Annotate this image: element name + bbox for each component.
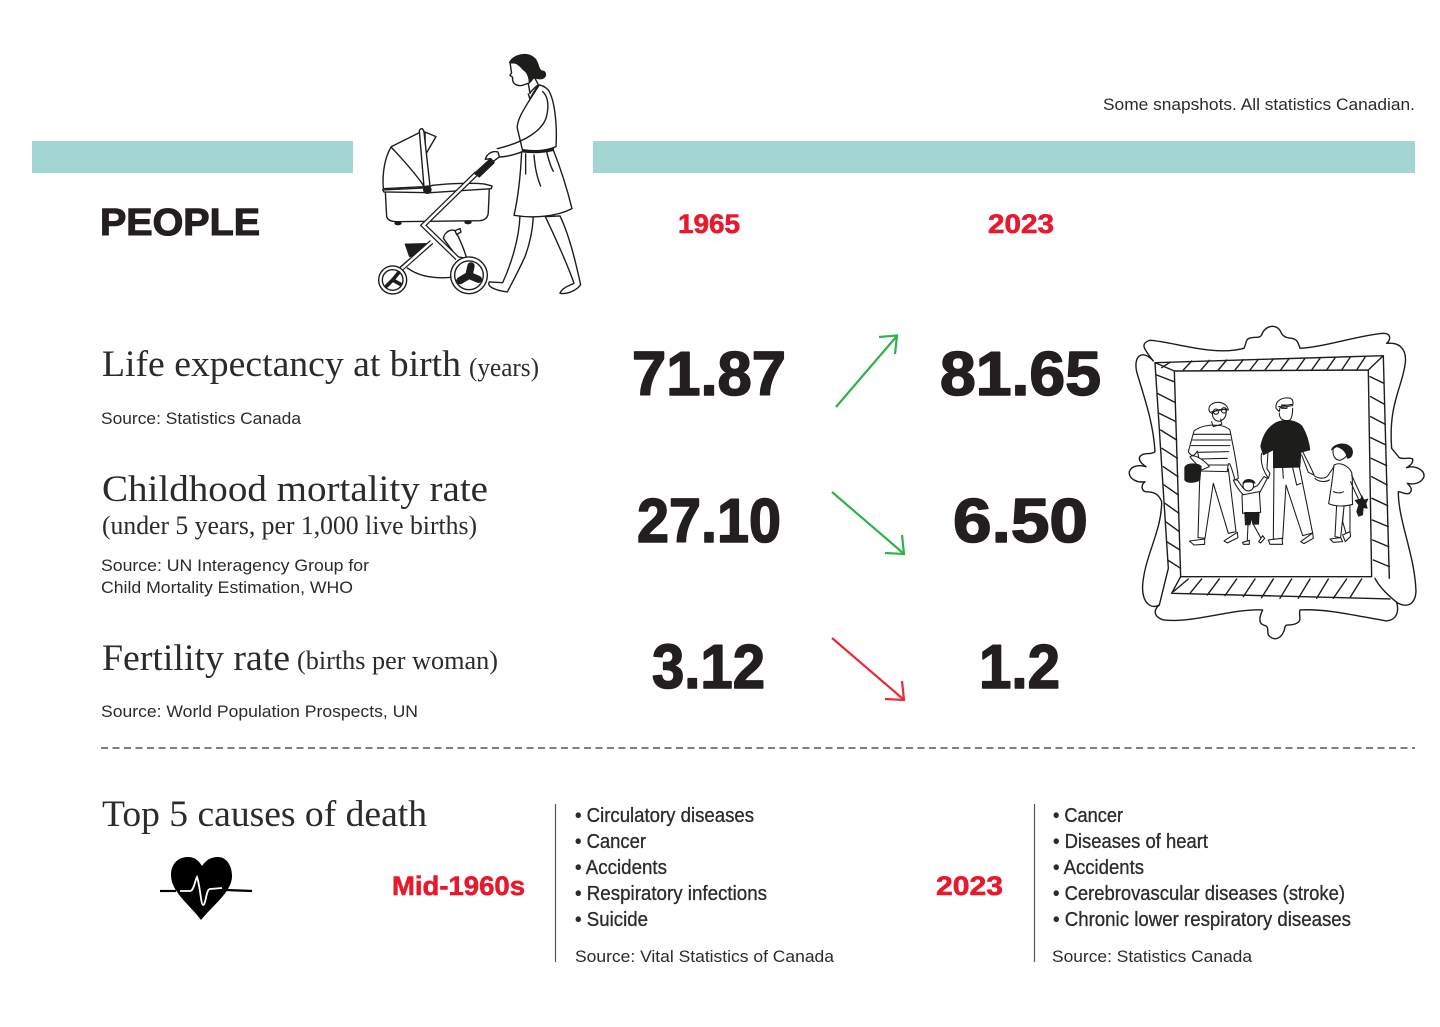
ornate outer frame <box>1129 326 1424 639</box>
woman hair <box>509 54 546 83</box>
value: life expectancy 1965: 71.87 <box>632 340 786 409</box>
life expectancy source: Source: Statistics Canada <box>101 409 302 428</box>
illustration: woman pushing stroller <box>379 54 581 294</box>
boy <box>1233 477 1267 544</box>
value: life expectancy 2023: 81.65 <box>940 340 1101 409</box>
mother <box>1185 402 1238 545</box>
list: mid-1960s causes: • Accidents <box>575 857 667 879</box>
storage and bag <box>405 243 427 257</box>
childhood mortality source <box>101 556 369 597</box>
stroller basket <box>385 188 489 222</box>
label: mid-1960s: Mid-1960s <box>392 871 525 901</box>
list: mid-1960s causes: • Circulatory diseases <box>575 805 754 827</box>
stroller canopy <box>383 147 424 189</box>
vertical rule 2 <box>1034 804 1036 962</box>
arrow: fertility down <box>832 638 904 700</box>
column header 2023: 2023 <box>988 209 1054 239</box>
source: vital statistics: Source: Vital Statistics of Canada <box>575 947 835 966</box>
list: mid-1960s causes: • Cancer <box>575 831 646 853</box>
illustration: family in picture frame <box>1129 326 1424 639</box>
fertility source: Source: World Population Prospects, UN <box>101 702 418 721</box>
woman torso <box>517 85 556 151</box>
list: 2023 causes: • Cancer <box>1053 805 1123 827</box>
woman face <box>510 63 538 93</box>
vertical rule 1 <box>554 804 556 962</box>
dashed divider <box>101 747 1415 749</box>
list: 2023 causes: • Chronic lower respiratory diseases <box>1053 909 1351 931</box>
heading: top 5 causes of death: Top 5 causes of death <box>102 794 428 835</box>
father <box>1261 398 1314 544</box>
woman skirt <box>514 148 572 217</box>
list: 2023 causes <box>1053 805 1351 931</box>
value: fertility 1965: 3.12 <box>652 633 765 702</box>
arrow: mortality down <box>832 492 904 554</box>
source: statistics canada: Source: Statistics Canada <box>1052 947 1253 966</box>
life expectancy unit: (years) <box>469 353 539 382</box>
childhood mortality label: Childhood mortality rate <box>102 469 488 510</box>
frame inner band <box>1155 356 1397 605</box>
fertility label: Fertility rate <box>102 638 290 679</box>
value: fertility 2023: 1.2 <box>979 633 1060 702</box>
arrow: life expectancy up <box>836 336 897 407</box>
subtitle note: Some snapshots. All statistics Canadian. <box>1103 95 1415 114</box>
list: mid-1960s causes: • Respiratory infections <box>575 883 767 905</box>
wheels <box>379 266 407 294</box>
stroller frame <box>399 172 478 271</box>
childhood mortality source: Source: UN Interagency Group for <box>101 556 369 575</box>
list: 2023 causes: • Accidents <box>1053 857 1144 879</box>
life expectancy label: Life expectancy at birth <box>102 344 461 385</box>
list: 2023 causes: • Cerebrovascular diseases (stroke) <box>1053 883 1345 905</box>
girl <box>1314 444 1368 542</box>
childhood mortality source: Child Mortality Estimation, WHO <box>101 578 353 597</box>
woman legs <box>489 215 533 292</box>
waist belt <box>523 148 554 153</box>
list: 2023 causes: • Diseases of heart <box>1053 831 1208 853</box>
woman arm <box>497 86 548 157</box>
childhood mortality unit: (under 5 years, per 1,000 live births) <box>102 511 477 540</box>
stroller handle <box>474 159 494 177</box>
section title: people: PEOPLE <box>100 202 260 244</box>
value: mortality 2023: 6.50 <box>953 487 1088 556</box>
row: life expectancy <box>101 344 539 428</box>
fertility unit: (births per woman) <box>297 646 498 675</box>
list: mid-1960s causes <box>575 805 767 931</box>
column header 1965: 1965 <box>678 209 740 239</box>
frame hatching <box>1162 357 1365 370</box>
label: 2023 causes: 2023 <box>936 871 1003 901</box>
icon: heart with pulse <box>160 857 252 920</box>
header band right <box>593 141 1415 173</box>
row: childhood mortality <box>101 469 488 597</box>
row: fertility <box>101 638 498 721</box>
list: mid-1960s causes: • Suicide <box>575 909 648 931</box>
header band left <box>32 141 353 173</box>
value: mortality 1965: 27.10 <box>637 487 781 556</box>
hand <box>485 152 499 161</box>
